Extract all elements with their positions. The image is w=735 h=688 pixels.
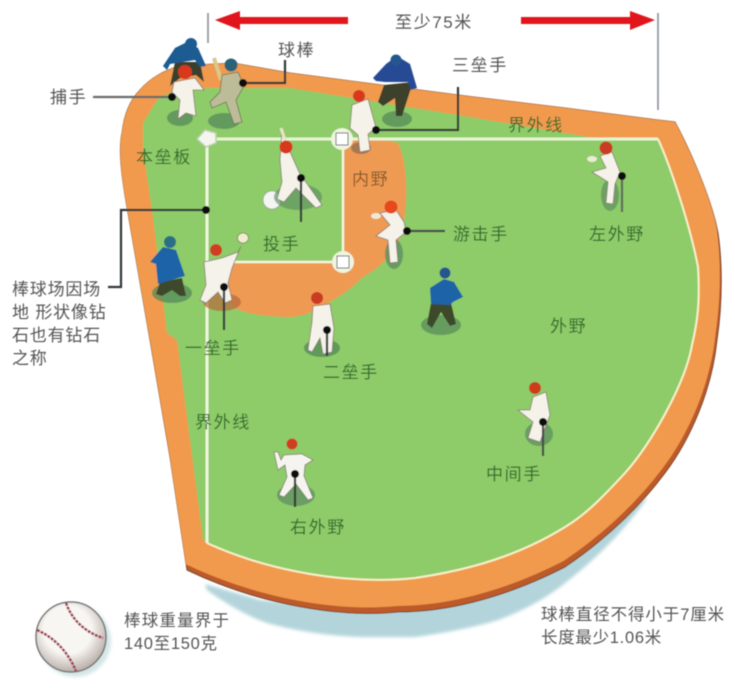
- home plate: [197, 130, 216, 147]
- pointer: diamond note: [108, 210, 206, 287]
- label: distance: 至少75米: [395, 13, 473, 32]
- pointer dots: [168, 79, 626, 478]
- outfield wall rim: [120, 63, 721, 613]
- pointer: shortstop: [407, 230, 445, 232]
- label: catcher: 捕手: [50, 88, 87, 107]
- label: left fielder: 左外野: [589, 225, 645, 244]
- grass: [143, 88, 699, 580]
- pitching mound: [263, 191, 281, 209]
- player: shortstop: [371, 200, 406, 269]
- label: center fielder: 中间手: [486, 465, 542, 484]
- label: infield: 内野: [352, 170, 389, 189]
- pointer: first baseman: [223, 287, 225, 330]
- player: batter: [208, 58, 244, 129]
- player: second baseman: [304, 292, 340, 357]
- pointer: pitcher: [300, 178, 302, 222]
- baseball field: [118, 57, 721, 613]
- pointer: catcher: [93, 96, 172, 98]
- label: pitcher: 投手: [263, 235, 300, 254]
- player: pitcher: [274, 128, 322, 210]
- icon: baseball: [36, 602, 111, 677]
- infield dirt: [226, 139, 406, 317]
- player: first base umpire: [150, 236, 192, 303]
- player: left fielder: [587, 142, 620, 211]
- note: bat size: 长度最少1.06米: [541, 628, 662, 647]
- note: diamond nickname: 石也有钻石: [12, 326, 101, 345]
- player: umpire behind catcher: [163, 38, 206, 86]
- label: right fielder: 右外野: [290, 518, 346, 537]
- label: first baseman: 一垒手: [185, 339, 241, 358]
- player: umpire behind third base: [373, 54, 417, 127]
- label: bat: 球棒: [278, 41, 315, 60]
- third base: [331, 128, 353, 150]
- note: diamond nickname: 之称: [12, 349, 48, 368]
- pointer: second baseman: [326, 330, 328, 356]
- arrow: right: [521, 11, 655, 30]
- label: foul line left: 界外线: [195, 413, 251, 432]
- player: right fielder: [274, 438, 315, 506]
- arrow: left: [215, 11, 348, 30]
- player: outfield umpire: [421, 268, 463, 335]
- foul lines and base paths: [207, 139, 699, 580]
- note: ball weight: 140至150克: [124, 634, 218, 653]
- pointer: third baseman: [376, 87, 458, 130]
- note: diamond nickname: 棒球场因场: [12, 280, 101, 299]
- label: shortstop: 游击手: [453, 225, 509, 244]
- label: home plate: 本垒板: [136, 148, 192, 167]
- field shadow: [205, 497, 648, 637]
- second base: [332, 251, 354, 273]
- warning track: [118, 57, 720, 607]
- player: third baseman: [350, 90, 376, 154]
- player: first baseman: [200, 233, 248, 311]
- label: second baseman: 二垒手: [323, 363, 379, 382]
- note: ball weight: 棒球重量界于: [124, 611, 230, 630]
- pointer: bat: [243, 60, 285, 83]
- pointer: left fielder: [621, 176, 623, 212]
- player: catcher: [167, 65, 204, 126]
- pointer: center fielder: [542, 422, 544, 456]
- note: bat size: 球棒直径不得小于7厘米: [541, 605, 725, 624]
- note: diamond nickname: 地 形状像钻: [12, 303, 107, 322]
- pointer lines: [93, 60, 622, 507]
- label: outfield: 外野: [550, 317, 587, 336]
- player: center fielder: [518, 382, 553, 446]
- label: third baseman: 三垒手: [452, 56, 508, 75]
- pointer: right fielder: [294, 474, 296, 507]
- label: foul line top: 界外线: [508, 116, 564, 135]
- dimension lines: [208, 13, 658, 110]
